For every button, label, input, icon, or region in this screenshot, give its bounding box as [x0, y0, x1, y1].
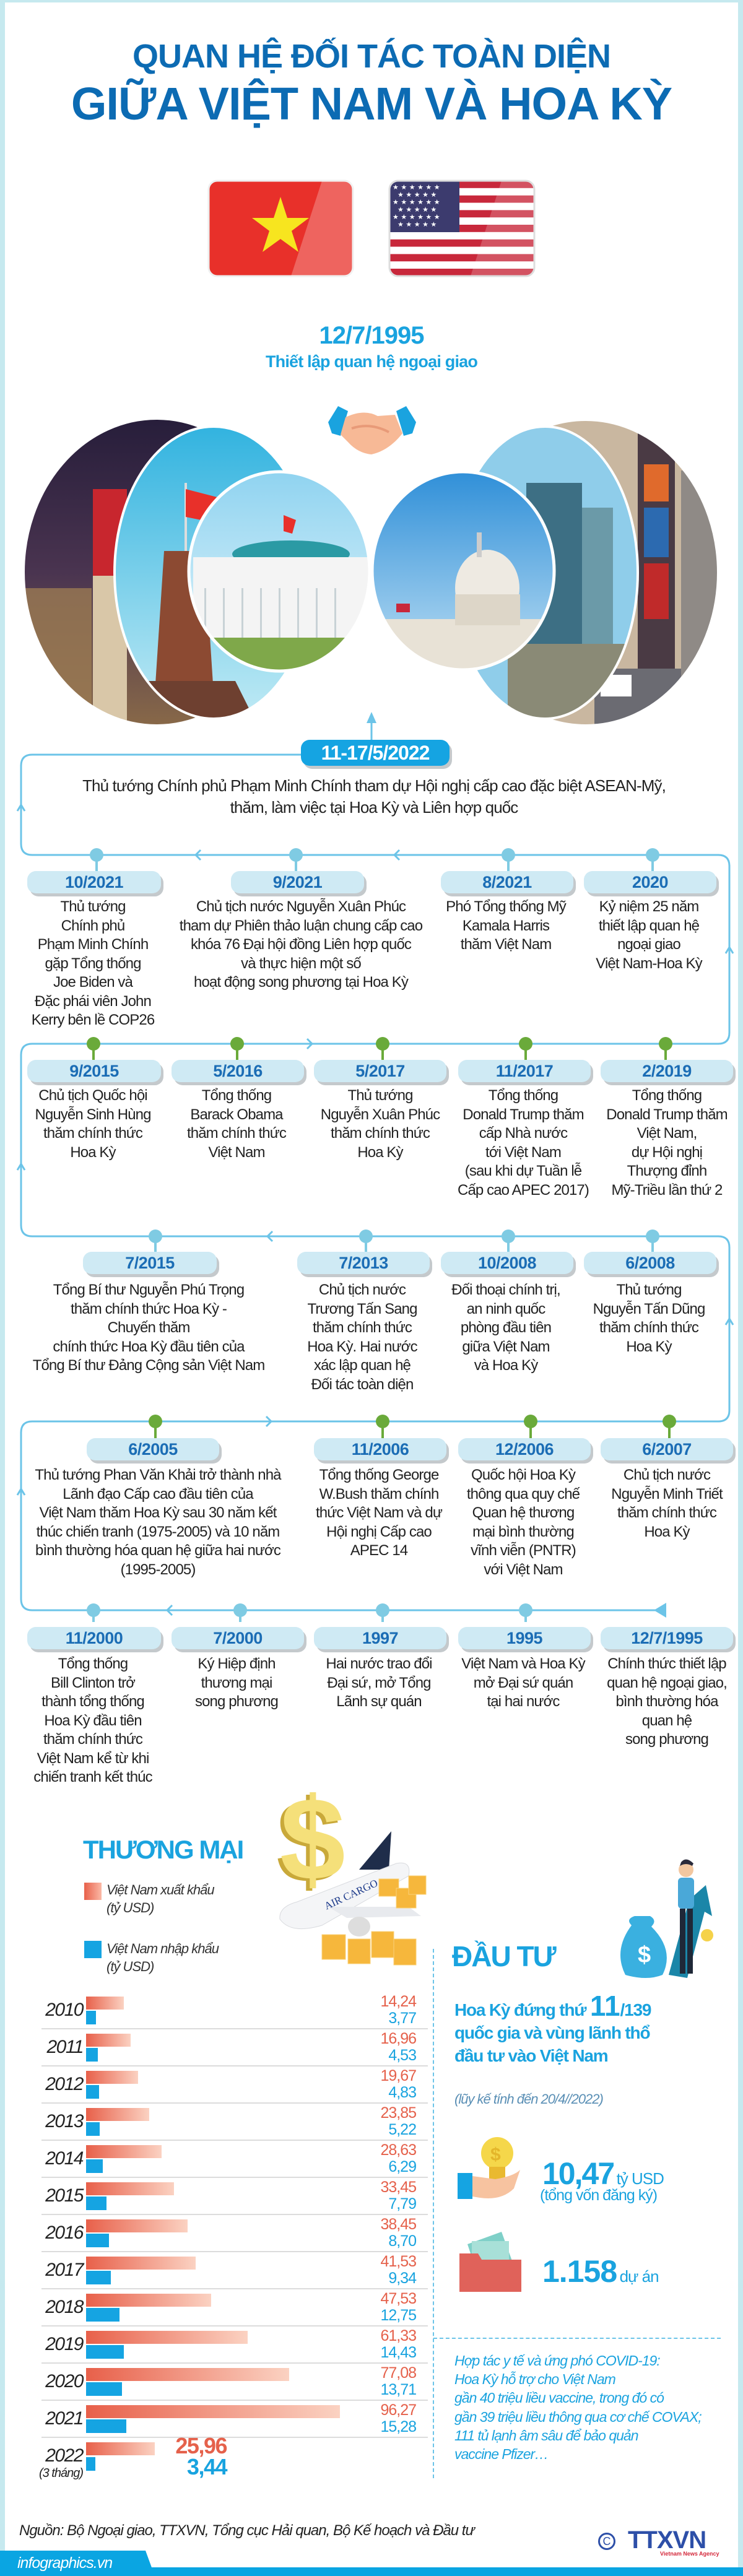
text: Việt Nam: [208, 1144, 265, 1160]
bar chart: trade: 3,44: [187, 2454, 227, 2479]
footer bar: infographics.vn: [0, 2551, 743, 2576]
text: Việt Nam,: [637, 1125, 697, 1142]
text: Thủ tướng Phan Văn Khải trở thành nhà: [35, 1467, 281, 1483]
row 4: 6/2005: [128, 1440, 178, 1459]
text: 1995: [506, 1629, 542, 1647]
text: 1997: [362, 1629, 398, 1647]
text: APEC 14: [350, 1542, 407, 1559]
text: 7/2000: [213, 1629, 263, 1647]
text: gặp Tổng thống: [45, 955, 141, 972]
bar chart: trade: 2022: [45, 2445, 83, 2466]
bar chart: trade: 3,77: [388, 2010, 416, 2027]
heading: establishment date: 12/7/1995: [319, 322, 424, 349]
text: Kỷ niệm 25 năm: [599, 898, 698, 915]
bar chart: trade: 8,70: [388, 2232, 416, 2250]
text: Hoa Kỳ: [70, 1144, 116, 1160]
text: dự Hội nghị: [632, 1144, 702, 1160]
row 4: [87, 1438, 219, 1460]
text: thăm chính thức: [313, 1319, 412, 1336]
heading: ĐẦU TƯ: ĐẦU TƯ: [452, 1940, 555, 1972]
text: chiến tranh kết thúc: [33, 1769, 152, 1785]
logo: TTXVN: Vietnam News Agency: [660, 2551, 719, 2557]
text: mở Đại sứ quán: [474, 1674, 573, 1691]
text: Hoa Kỳ. Hai nước: [307, 1338, 417, 1355]
text: Đặc phái viên John: [35, 993, 151, 1009]
text: song phương: [195, 1693, 278, 1710]
text: thăm chính thức: [43, 1731, 142, 1748]
text: thăm chính thức: [331, 1125, 430, 1142]
heading: establishment date: [266, 322, 477, 371]
text: 2/2019: [642, 1062, 692, 1080]
text: xác lập quan hệ: [314, 1357, 411, 1374]
legend: [84, 1882, 219, 1974]
bar chart: trade: 2011: [46, 2037, 83, 2057]
bar chart: trade: 33,45: [380, 2179, 416, 2196]
text: tại hai nước: [487, 1693, 560, 1710]
text: thông qua quy chế: [467, 1486, 580, 1502]
text: Phạm Minh Chính: [38, 936, 148, 953]
text: COVID-19 cooperation: vaccine Pfizer…: [454, 2446, 548, 2462]
text: Tổng thống George: [319, 1467, 438, 1483]
bar chart: trade: 4,53: [388, 2047, 416, 2064]
timeline lines: [16, 712, 734, 1622]
text: investment ranking: quốc gia và vùng lãnh thổ: [454, 2023, 650, 2042]
text: Tổng thống: [489, 1087, 558, 1104]
photo collage: Vietnam: [25, 420, 368, 724]
text: Chủ tịch Quốc hội: [38, 1087, 147, 1104]
legend: (tỷ USD): [106, 1959, 154, 1974]
text: (1995-2005): [121, 1561, 195, 1577]
row 3: [83, 1252, 217, 1274]
row 5: 11/2000: [66, 1629, 123, 1647]
text: Hai nước trao đổi: [326, 1655, 432, 1672]
text: Nguyễn Minh Triết: [611, 1486, 723, 1502]
text: investment ranking: đầu tư vào Việt Nam: [454, 2046, 607, 2065]
text: thành tổng thống: [41, 1693, 144, 1710]
flags: [208, 180, 535, 277]
text: Việt Nam thăm Hoa Kỳ sau 30 năm kết: [40, 1504, 276, 1521]
heading: establishment date: Thiết lập quan hệ ngoại giao: [266, 352, 477, 371]
bar chart: trade: 13,71: [380, 2381, 416, 2398]
text: Cấp cao APEC 2017): [458, 1181, 589, 1199]
text: COVID-19 cooperation: gần 40 triệu liều vaccine, trong đó có: [454, 2390, 664, 2406]
bar chart: trade: 2014: [45, 2148, 83, 2169]
timeline: 11-17/5/2022: 11-17/5/2022: [321, 742, 429, 764]
bar chart: trade: 28,63: [380, 2141, 416, 2159]
text: 2022 event: thăm, làm việc tại Hoa Kỳ và Liên hợp quốc: [230, 798, 518, 817]
text: tham dự Phiên thảo luận chung cấp cao: [180, 917, 422, 934]
icon: handshake: [328, 406, 416, 454]
logo: TTXVN: C: [603, 2535, 610, 2548]
text: Bill Clinton trở: [51, 1674, 135, 1691]
legend: Việt Nam nhập khẩu: [106, 1941, 219, 1956]
text: 12/7/1995: [631, 1629, 703, 1647]
text: Lãnh sự quán: [336, 1693, 422, 1710]
text: bình thường hóa quan hệ giữa hai nước: [35, 1542, 280, 1559]
row 2: [27, 1060, 161, 1082]
text: 6/2007: [642, 1440, 692, 1459]
bar chart: trade: 2019: [45, 2334, 83, 2354]
text: 11/2017: [496, 1062, 553, 1080]
text: thăm chính thức: [43, 1125, 142, 1142]
bar chart: trade: 2016: [45, 2223, 83, 2243]
text: COVID-19 cooperation: Hoa Kỳ hỗ trợ cho Việt Nam: [454, 2371, 615, 2387]
text: mại bình thường: [472, 1523, 574, 1540]
bar chart: trade: 2015: [45, 2185, 83, 2206]
title: QUAN HỆ ĐỐI TÁC TOÀN DIỆN: [133, 38, 610, 75]
text: Phó Tổng thống Mỹ: [446, 898, 566, 915]
stat: registered capital: 10,47 tỷ USD: [542, 2156, 664, 2191]
text: Tổng thống: [202, 1087, 271, 1104]
text: Nguyễn Sinh Hùng: [35, 1106, 151, 1123]
text: Trương Tấn Sang: [307, 1300, 417, 1317]
bar chart: trade: 23,85: [380, 2104, 416, 2122]
footer bar: infographics.vn: infographics.vn: [17, 2554, 112, 2572]
text: Donald Trump thăm: [606, 1106, 728, 1123]
bar chart: trade: 16,96: [380, 2030, 416, 2047]
text: thăm chính thức: [617, 1504, 716, 1521]
text: COVID-19 cooperation: 111 tủ lạnh âm sâu để bảo quản: [454, 2427, 638, 2444]
row 1: [27, 871, 161, 893]
text: Hoa Kỳ đầu tiên: [44, 1712, 142, 1728]
text: Mỹ-Triều lần thứ 2: [611, 1181, 723, 1199]
text: Đại sứ, mở Tổng: [327, 1674, 431, 1691]
icon: USA flag: ★ ★ ★ ★ ★ ★: [393, 198, 440, 206]
bar chart: trade: 47,53: [380, 2290, 416, 2307]
row 3: 7/2015: [125, 1254, 175, 1272]
bar chart: trade: 14,24: [380, 1993, 416, 2010]
text: Chuyến thăm: [108, 1319, 189, 1336]
text: Chính phủ: [61, 917, 124, 934]
text: Thủ tướng: [616, 1281, 682, 1298]
text: Lãnh đạo Cấp cao đầu tiên của: [63, 1486, 253, 1502]
bar chart: trade: 19,67: [380, 2067, 416, 2084]
icon: dollar and cargo plane: AIR CARGO: [323, 1877, 380, 1912]
text: Donald Trump thăm: [463, 1106, 584, 1123]
bar chart: trade: 2020: [45, 2371, 83, 2392]
bar chart: trade: 77,08: [380, 2364, 416, 2382]
text: COVID-19 cooperation: [454, 2353, 702, 2462]
text: 7/2013: [339, 1254, 388, 1272]
icon: Vietnam flag: [209, 181, 353, 276]
bar chart: trade: 2012: [45, 2074, 83, 2094]
row 2: 9/2015: [69, 1062, 119, 1080]
icon: USA flag: ★ ★ ★ ★ ★: [398, 206, 437, 214]
text: Chủ tịch nước Nguyễn Xuân Phúc: [196, 898, 406, 915]
text: ngoại giao: [617, 936, 680, 953]
text: và thực hiện một số: [241, 955, 361, 972]
bar chart: trade: 61,33: [380, 2327, 416, 2344]
row 1: 10/2021: [65, 873, 123, 891]
text: cumulative note: (lũy kế tính đến 20/4//2022): [454, 2091, 603, 2107]
row 5: [27, 1627, 161, 1649]
text: investment ranking: Hoa Kỳ đứng thứ 11/139: [454, 1990, 651, 2022]
footer: source: Nguồn: Bộ Ngoại giao, TTXVN, Tổng cục Hải quan, Bộ Kế hoạch và Đầu tư: [19, 2522, 474, 2539]
bar chart: trade: 14,43: [380, 2344, 416, 2361]
text: Kamala Harris: [463, 917, 549, 934]
bar chart: trade: 7,79: [388, 2195, 416, 2213]
bar chart: trade: 2010: [45, 2000, 83, 2020]
bar chart: trade: 15,28: [380, 2418, 416, 2435]
dots: [87, 848, 659, 1627]
text: Kerry bên lề COP26: [32, 1012, 154, 1028]
timeline: 11-17/5/2022: [301, 740, 450, 766]
text: thức Việt Nam và dự: [316, 1504, 442, 1521]
text: 6/2008: [625, 1254, 675, 1272]
text: thăm chính thức Hoa Kỳ -: [71, 1300, 227, 1317]
icon: USA flag: ★ ★ ★ ★ ★: [398, 220, 437, 228]
stat: projects: 1.158 dự án: [542, 2254, 659, 2289]
text: Nguyễn Xuân Phúc: [321, 1106, 440, 1123]
text: 5/2016: [213, 1062, 263, 1080]
text: Quan hệ thương: [472, 1504, 574, 1521]
text: thương mại: [201, 1674, 272, 1691]
text: 11/2006: [352, 1440, 409, 1459]
logo: TTXVN: TTXVN: [628, 2526, 706, 2554]
bar chart: trade: 2021: [45, 2408, 83, 2429]
text: Tổng Bí thư Đảng Cộng sản Việt Nam: [33, 1357, 264, 1374]
logo: TTXVN: [598, 2526, 719, 2557]
text: Chủ tịch nước: [319, 1281, 406, 1298]
bar chart: trade: 4,83: [388, 2084, 416, 2101]
bar chart: trade: 41,53: [380, 2253, 416, 2270]
text: 2022 event: [82, 776, 666, 817]
icon: dollar and cargo plane: [276, 1786, 426, 1965]
text: Thượng đỉnh: [627, 1163, 706, 1179]
icon: coin in hand: $: [490, 2144, 501, 2165]
text: Hoa Kỳ: [626, 1338, 672, 1355]
bar chart: trade: 5,22: [388, 2121, 416, 2138]
text: COVID-19 cooperation: Hợp tác y tế và ứng phó COVID-19:: [454, 2353, 660, 2369]
text: Hoa Kỳ: [357, 1144, 403, 1160]
text: phòng đầu tiên: [461, 1319, 551, 1336]
text: và Hoa Kỳ: [474, 1357, 537, 1374]
text: khóa 76 Đại hội đồng Liên hợp quốc: [191, 936, 411, 953]
bar chart: trade: (3 tháng): [39, 2466, 83, 2480]
text: 12/2006: [495, 1440, 554, 1459]
text: investment ranking: [454, 1990, 651, 2065]
bar chart: trade: 12,75: [380, 2307, 416, 2324]
title: GIỮA VIỆT NAM VÀ HOA KỲ: [71, 78, 672, 129]
bar chart: trade: 2013: [45, 2111, 83, 2131]
icon: folder: [459, 2232, 521, 2292]
text: chính thức Hoa Kỳ đầu tiên của: [53, 1338, 245, 1355]
text: quan hệ ngoại giao,: [607, 1674, 727, 1691]
text: thúc chiến tranh (1975-2005) và 10 năm: [37, 1523, 279, 1540]
text: cấp Nhà nước: [479, 1125, 567, 1142]
text: thăm chính thức: [187, 1125, 286, 1142]
text: quan hệ: [642, 1712, 692, 1728]
text: Chính thức thiết lập: [607, 1655, 726, 1672]
text: tới Việt Nam: [485, 1144, 561, 1160]
text: Tổng Bí thư Nguyễn Phú Trọng: [53, 1281, 244, 1298]
text: Tổng thống: [58, 1655, 128, 1672]
legend: (tỷ USD): [106, 1900, 154, 1915]
bar chart: trade: 38,45: [380, 2216, 416, 2233]
icon: investor with money bag: $: [638, 1942, 651, 1968]
text: hoạt động song phương tại Hoa Kỳ: [194, 974, 408, 991]
title: [71, 37, 672, 129]
text: Tổng thống: [632, 1087, 702, 1104]
text: thăm chính thức: [599, 1319, 698, 1336]
text: Barack Obama: [190, 1106, 283, 1123]
text: Chủ tịch nước: [624, 1467, 710, 1483]
text: 9/2021: [273, 873, 322, 891]
text: (tổng vốn đăng ký): [540, 2187, 657, 2204]
text: W.Bush thăm chính: [319, 1486, 438, 1502]
text: 8/2021: [482, 873, 532, 891]
text: 10/2008: [478, 1254, 536, 1272]
text: song phương: [625, 1731, 708, 1748]
text: Quốc hội Hoa Kỳ: [471, 1467, 575, 1483]
text: vĩnh viễn (PNTR): [471, 1542, 576, 1559]
photo collage: USA: [374, 421, 717, 724]
icon: USA flag: ★ ★ ★ ★ ★ ★: [393, 183, 440, 191]
legend: Việt Nam xuất khẩu: [106, 1882, 214, 1897]
text: (sau khi dự Tuần lễ: [465, 1163, 581, 1179]
bar chart: trade: 6,29: [388, 2158, 416, 2175]
text: 2020: [632, 873, 668, 891]
text: Thủ tướng: [347, 1087, 413, 1104]
icon: investor with money bag: [620, 1860, 713, 1978]
text: Thủ tướng: [60, 898, 126, 915]
bar chart: trade: 25,96: [175, 2433, 227, 2458]
text: thiết lập quan hệ: [599, 917, 699, 934]
text: Hoa Kỳ: [644, 1523, 690, 1540]
text: Joe Biden và: [53, 974, 133, 991]
text: Đối tác toàn diện: [311, 1376, 413, 1393]
icon: USA flag: ★ ★ ★ ★ ★ ★: [393, 213, 440, 221]
text: Việt Nam và Hoa Kỳ: [461, 1655, 585, 1672]
bar chart: trade: 96,27: [380, 2401, 416, 2419]
text: 2022 event: Thủ tướng Chính phủ Phạm Minh Chính tham dự Hội nghị cấp cao đặc biệt ASEAN-Mỹ,: [82, 776, 666, 795]
text: Nguyễn Tấn Dũng: [593, 1300, 705, 1317]
bar chart: trade: 2017: [45, 2260, 83, 2280]
text: Hội nghị Cấp cao: [326, 1523, 432, 1540]
text: 5/2017: [355, 1062, 405, 1080]
bar chart: trade: [39, 1993, 428, 2480]
text: bình thường hóa: [615, 1693, 718, 1710]
text: Ký Hiệp định: [198, 1655, 276, 1672]
text: Việt Nam kể từ khi: [37, 1750, 149, 1767]
text: Đối thoại chính trị,: [451, 1281, 560, 1298]
text: COVID-19 cooperation: gần 39 triệu liều thông qua cơ chế COVAX;: [454, 2409, 702, 2425]
text: an ninh quốc: [467, 1300, 545, 1317]
text: giữa Việt Nam: [462, 1338, 550, 1355]
heading: THƯƠNG MẠI: THƯƠNG MẠI: [83, 1835, 243, 1864]
bar chart: trade: 9,34: [388, 2270, 416, 2287]
divider: dashed: [433, 1949, 434, 2478]
icon: USA flag: [389, 181, 534, 276]
bar chart: trade: 2018: [45, 2297, 83, 2317]
text: Việt Nam-Hoa Kỳ: [596, 955, 702, 972]
text: thăm Việt Nam: [461, 936, 551, 953]
icon: coin in hand: [458, 2137, 520, 2199]
icon: USA flag: ★ ★ ★ ★ ★: [398, 191, 437, 199]
text: với Việt Nam: [484, 1561, 563, 1577]
